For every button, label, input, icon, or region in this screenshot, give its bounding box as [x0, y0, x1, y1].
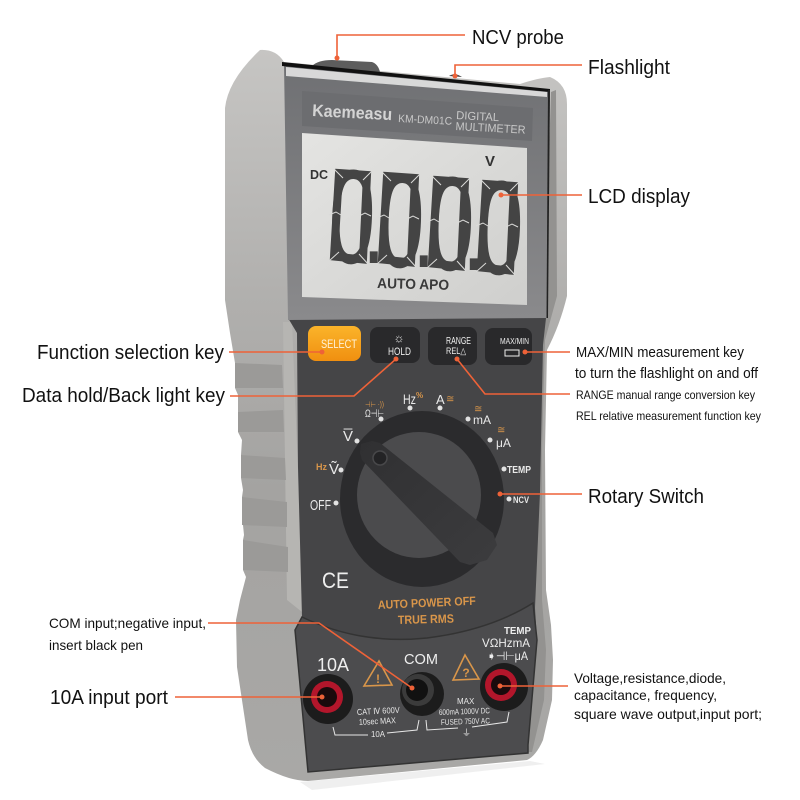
top edge highlight [286, 67, 547, 97]
rotary dial labels: A [436, 392, 445, 407]
NCV probe tip [312, 60, 380, 72]
lcd digits: . [466, 200, 482, 287]
lcd digits: 0 [375, 145, 427, 297]
port ratings right: FUSED 750V AC [441, 716, 490, 727]
right port labels: ➧⊣⊢μA [487, 649, 528, 663]
rotary dial labels: ≅ [497, 425, 505, 436]
front panel [288, 318, 546, 772]
meter body [225, 50, 567, 790]
port brackets [333, 712, 509, 735]
grip ridges [235, 363, 288, 572]
model number: KM-DM01C [398, 113, 452, 128]
select key: SELECT [321, 339, 357, 351]
lcd DC label: DC [310, 168, 328, 182]
port panel [295, 603, 537, 772]
port ratings left: CAT Ⅳ 600V [357, 705, 400, 717]
range key [428, 327, 477, 365]
10A port [303, 674, 353, 724]
COM label: COM [404, 651, 438, 668]
rotary dial labels: OFF [310, 497, 331, 514]
CE mark: CE [322, 568, 349, 593]
warning triangle left [364, 661, 392, 686]
lcd V label: V [485, 153, 495, 170]
lcd digits: . [416, 197, 432, 284]
callout: rotary switch [498, 486, 704, 508]
callout: COM input [49, 615, 414, 690]
callout: 10A input port: 10A input port [50, 687, 168, 709]
warning triangle left: ! [376, 672, 380, 686]
callout: COM input: COM input;negative input, [49, 615, 206, 631]
brand strip [302, 91, 533, 141]
port ratings left: 10A [371, 729, 385, 739]
lcd digits [326, 141, 526, 304]
flashlight tip [449, 74, 462, 77]
rotary dial labels: ≅ [474, 404, 482, 415]
callout: function selection key: Function selection key [37, 342, 224, 364]
callout: rotary switch: Rotary Switch [588, 486, 704, 508]
rotary dial labels: Hz [316, 462, 327, 472]
rotary dial labels: V̅ [343, 428, 353, 445]
rotary dial labels: % [416, 391, 423, 400]
callout: range key [454, 356, 761, 423]
rotary switch [340, 411, 504, 587]
callout: LCD display: LCD display [588, 186, 690, 208]
brand name: Kaemeasu [312, 101, 393, 124]
port ratings right: MAX [457, 697, 475, 706]
callout: flashlight [452, 57, 670, 79]
callout: LCD display [498, 186, 690, 208]
hold key: ☼ [394, 331, 404, 345]
10A label: 10A [317, 655, 349, 675]
rotary dial labels: ⊣⊢ ·)) [365, 400, 384, 409]
callout: function selection key [37, 342, 324, 364]
warning triangle right [453, 655, 479, 680]
rubber boot [225, 50, 567, 781]
callout: range key: RANGE manual range conversion key [576, 388, 755, 402]
rotary dial labels: Ṽ [329, 461, 339, 478]
rotary dial labels: TEMP [507, 464, 531, 476]
callout: max min key: to turn the flashlight on and off [575, 366, 759, 382]
callout: data hold key: Data hold/Back light key [22, 385, 225, 407]
max min key [485, 328, 532, 365]
port ratings right: ⏚ [462, 728, 471, 738]
rotary dial labels: ≅ [446, 394, 454, 405]
handle pointer button [373, 451, 387, 465]
callout: voltage input port: square wave output,input port; [574, 706, 762, 722]
display surround [284, 64, 550, 320]
select key [308, 326, 361, 361]
auto power off text: AUTO POWER OFF [378, 594, 476, 612]
callout: max min key: MAX/MIN measurement key [576, 345, 745, 361]
callout: NCV probe [334, 27, 564, 60]
rotary dial labels: Hz [403, 391, 416, 407]
warning triangle right: ? [462, 666, 470, 680]
right port labels [482, 625, 531, 663]
rubber inner strip [283, 322, 302, 612]
lcd digits: . [366, 193, 382, 280]
lcd digits: 0 [425, 148, 477, 300]
rotary dial labels: mA [473, 413, 491, 427]
port ratings left: 10sec MAX [359, 715, 396, 727]
port ratings right: 600mA 1000V DC [439, 706, 490, 717]
right rubber shade [528, 90, 557, 752]
right port labels: VΩHzmA [482, 636, 530, 650]
rotary dial labels: μA [496, 436, 511, 450]
callout: NCV probe: NCV probe [472, 27, 564, 49]
callout: voltage input port [498, 670, 762, 722]
ground shadow [300, 761, 545, 790]
callout: max min key [522, 345, 759, 382]
product type: MULTIMETER [455, 121, 526, 137]
callout: voltage input port: capacitance, frequency, [574, 687, 717, 703]
switch handle [360, 441, 497, 565]
lcd status text: AUTO APO [377, 276, 449, 294]
rotary dial labels: NCV [513, 495, 530, 506]
lcd digits: 0 [474, 152, 526, 304]
callout: range key: REL relative measurement function key [576, 409, 761, 423]
COM port [400, 672, 444, 716]
hold key [370, 327, 420, 363]
rotary dial labels [310, 391, 531, 514]
product type: DIGITAL [456, 110, 500, 124]
hold key: HOLD [388, 346, 411, 358]
lcd screen [302, 133, 527, 305]
max min key: MAX/MIN [500, 336, 529, 346]
rotary dial labels: Ω⊣⊢ [365, 408, 384, 420]
callout: data hold key [22, 356, 398, 407]
callout: voltage input port: Voltage,resistance,diode, [574, 670, 726, 686]
lcd digits: 0 [326, 141, 378, 293]
port ratings right [439, 697, 490, 738]
range key: REL△ [446, 346, 467, 357]
range key: RANGE [446, 336, 471, 347]
port ratings left [357, 705, 400, 739]
callout: flashlight: Flashlight [588, 57, 670, 79]
true rms text: TRUE RMS [398, 612, 454, 627]
callout: 10A input port [50, 687, 324, 709]
callout: COM input: insert black pen [49, 637, 143, 653]
voltage port [480, 663, 528, 711]
right port labels: TEMP [504, 625, 531, 637]
